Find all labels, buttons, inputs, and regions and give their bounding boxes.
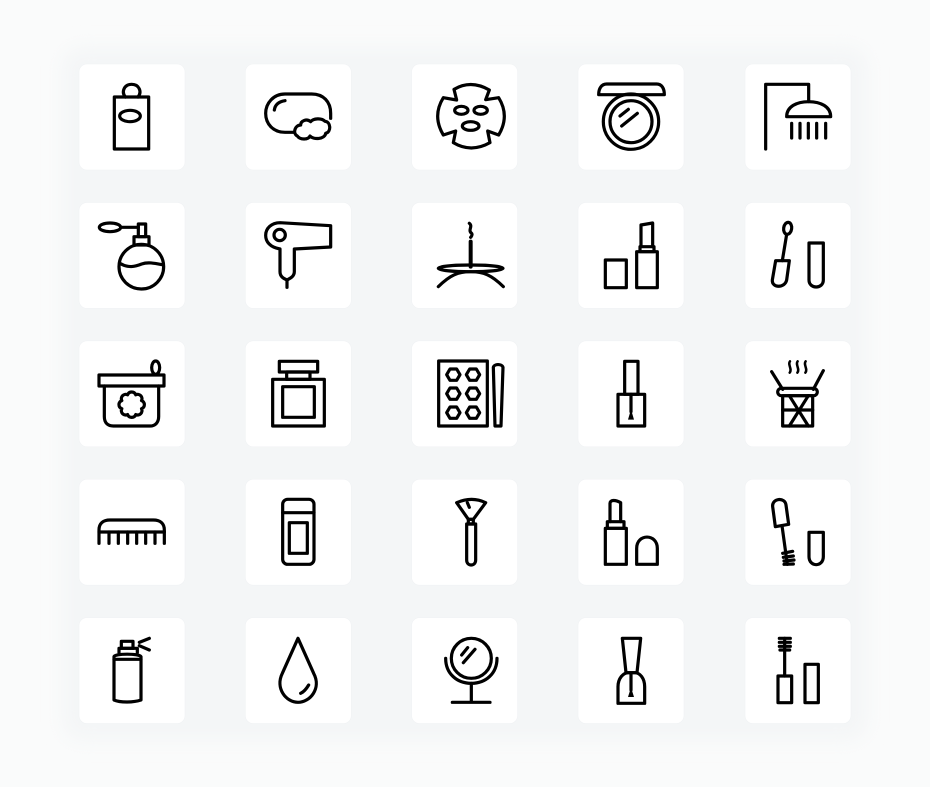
icon: aroma burner bbox=[772, 361, 823, 426]
icon: lipstick and rounded cap bbox=[605, 500, 657, 564]
icon: table mirror bbox=[446, 638, 497, 702]
card: eyeshadow palette bbox=[412, 341, 518, 447]
icon: cream jar bbox=[99, 361, 164, 426]
card: fan brush bbox=[412, 479, 518, 585]
card: comb bbox=[79, 479, 185, 585]
card: shampoo tube bbox=[245, 479, 351, 585]
icon: eyeshadow palette bbox=[439, 361, 503, 426]
card: nail polish with brush bbox=[578, 341, 684, 447]
card: hair dryer bbox=[245, 202, 351, 308]
card: shower bbox=[745, 64, 851, 170]
card: nail polish bottle bbox=[578, 618, 684, 724]
icon: compact mirror bbox=[599, 84, 664, 149]
icon: nail polish with brush bbox=[618, 361, 645, 426]
card: mascara wand and tube bbox=[745, 479, 851, 585]
icon: lipstick with cap bbox=[605, 223, 657, 288]
card: aroma burner bbox=[745, 341, 851, 447]
card: lipstick with cap bbox=[578, 202, 684, 308]
card: table mirror bbox=[412, 618, 518, 724]
card: cream jar bbox=[79, 341, 185, 447]
icon: mascara wand and tube bbox=[773, 500, 823, 565]
icon: incense stick bbox=[438, 223, 503, 287]
icon: comb bbox=[99, 520, 164, 543]
icon: water drop bbox=[280, 638, 316, 702]
icon: face mask bbox=[438, 84, 504, 148]
icon: lotion bottle bbox=[114, 84, 149, 149]
card: lip gloss applicator bbox=[745, 202, 851, 308]
card: square perfume bottle bbox=[245, 341, 351, 447]
icon: square perfume bottle bbox=[273, 361, 324, 426]
card: compact mirror bbox=[578, 64, 684, 170]
card: lipstick and rounded cap bbox=[578, 479, 684, 585]
icon: perfume atomizer bbox=[99, 223, 164, 289]
card: perfume atomizer bbox=[79, 202, 185, 308]
card: water drop bbox=[245, 618, 351, 724]
icon: hair dryer bbox=[266, 223, 331, 287]
icon: shampoo tube bbox=[283, 499, 314, 564]
card: hair spray bbox=[79, 618, 185, 724]
icon: shower bbox=[766, 84, 831, 149]
icon: hair spray bbox=[114, 638, 149, 702]
card: face mask bbox=[412, 64, 518, 170]
card: mascara and case bbox=[745, 618, 851, 724]
card: incense stick bbox=[412, 202, 518, 308]
card: soap with foam bbox=[245, 64, 351, 170]
icon: lip gloss applicator bbox=[772, 222, 823, 287]
icon: fan brush bbox=[457, 499, 486, 565]
icon: soap with foam bbox=[266, 94, 331, 139]
icon: nail polish bottle bbox=[618, 638, 645, 703]
icon: mascara and case bbox=[778, 638, 818, 703]
card: lotion bottle bbox=[79, 64, 185, 170]
